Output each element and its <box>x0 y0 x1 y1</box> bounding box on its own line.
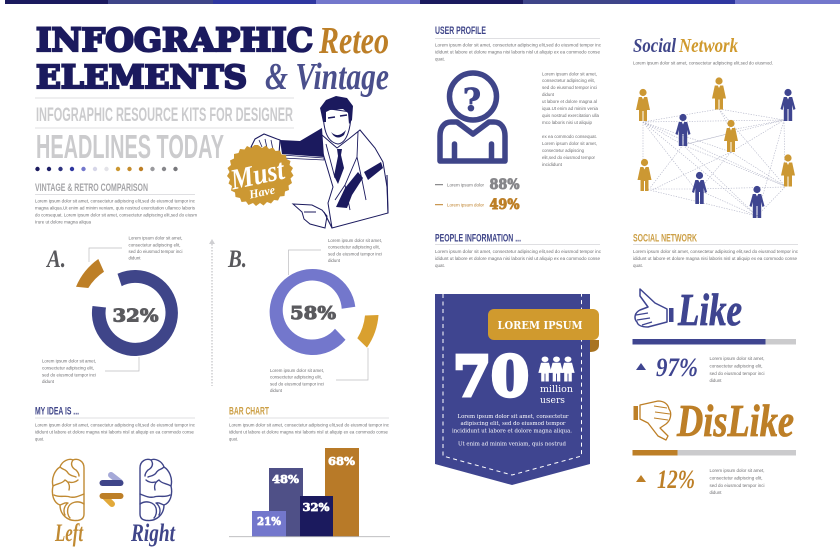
donut chart A: 32% <box>112 306 158 326</box>
title <box>36 20 389 98</box>
icon: anonymous user <box>440 73 505 161</box>
bar: 48% <box>269 468 303 536</box>
text: profile notes: consectetur adipiscing elit, <box>542 78 595 83</box>
stat: 88%: Lorem ipsum dolor <box>447 182 485 188</box>
text: dislike note: consectetur adipiscing elit, <box>710 476 762 480</box>
donut chart A <box>45 246 178 371</box>
icon: right brain <box>140 459 172 521</box>
callout: A top: Lorem ipsum dolor sit amet, <box>128 236 182 240</box>
text: profile notes: ut labore et dolore magna al <box>542 99 597 104</box>
ribbon: lorem ipsum <box>488 309 599 352</box>
text: comparison intro: Lorem ipsum dolor sit amet, consectetur adipiscing elit,sed do eiusmod tempor inc <box>35 198 196 204</box>
panel: like <box>632 284 796 383</box>
panel: social network title: Network <box>678 35 738 57</box>
text: profile notes: consectetur adipiscing <box>542 148 585 153</box>
icon: anonymous user: ? <box>463 82 481 118</box>
label: million users <box>540 385 573 406</box>
text: profile notes <box>542 72 600 167</box>
stat: 49%: Lorem ipsum dolor <box>447 202 485 208</box>
stat: 12% <box>636 465 695 494</box>
text: profile notes: Lorem ipsum dolor sit amet, <box>542 141 597 146</box>
text: comparison intro <box>35 198 197 224</box>
navy people nodes <box>676 89 796 218</box>
text: pocket description: Ut enim ad minim veniam, quis nostrud <box>458 442 566 448</box>
panel: people information heading: quat. <box>435 263 445 268</box>
panel: social network text: quat. <box>633 263 643 268</box>
panel: bar chart: ididunt ut labore et dolore magna nisi laboris nisl ut aliquip ex ea commodo conse <box>229 430 389 434</box>
label: left: Left <box>54 520 84 547</box>
panel: bar chart: BAR CHART <box>229 406 269 418</box>
text: comparison intro: Irure ut dolore magna aliqua <box>35 220 92 224</box>
icon: three people <box>538 356 575 381</box>
subtitle <box>35 98 294 165</box>
icon: swap arrows <box>102 475 120 504</box>
panel: social network title: Lorem ipsum dolor sit amet, consectetur adipiscing elit,sed do eiusmod. <box>633 60 773 66</box>
text: pocket description: adipiscing elit, sed do eiusmod tempor <box>460 421 566 427</box>
text: pocket description: incididunt ut labore et dolore magna aliqua. <box>452 428 572 434</box>
heading: vintage and retro comparison: VINTAGE & RETRO COMPARISON <box>35 182 148 194</box>
panel: social network title: Social <box>633 35 676 57</box>
badge: must have: Have <box>247 182 277 202</box>
subtitle: HEADLINES TODAY <box>36 128 224 165</box>
panel: social network text: SOCIAL NETWORK <box>633 232 697 244</box>
text: dislike note <box>710 468 765 495</box>
bar: 48%: 48% <box>272 473 300 486</box>
text: dislike note: didunt <box>710 490 722 495</box>
callout: A bottom: sed do eiusmod tempor inci <box>42 372 96 378</box>
network diagram <box>636 77 795 216</box>
callout: B bottom: sed do eiusmod tempor inci <box>270 382 324 386</box>
callout: B top <box>328 238 382 263</box>
word: dislike: DisLike <box>676 395 794 446</box>
callout: A bottom <box>42 358 96 384</box>
panel: bar chart <box>229 406 390 537</box>
callout: B top: didunt <box>328 258 341 263</box>
text: comparison intro: do consequat. Lorem ipsum dolor sit amet, consectetur adipiscing elit,sed do eiusm <box>35 212 197 218</box>
callout: B top: consectetur adipiscing elit, <box>328 244 380 250</box>
illustration: retro salesman <box>251 96 388 228</box>
callout: A top: sed do eiusmod tempor inci <box>128 249 183 254</box>
big number 70: 70 <box>453 344 529 408</box>
panel: people information heading: Lorem ipsum dolor sit amet, consectetur adipiscing elit,sed do eiusmod tempor inc <box>435 249 602 254</box>
label: right: Right <box>130 520 176 547</box>
panel: user profile: quat. <box>435 56 445 62</box>
text: profile notes: sed do eiusmod tempor inci <box>542 85 597 90</box>
text: profile notes: mco laboris nisi ut aliquip <box>542 120 593 125</box>
stat: 12%: 12% <box>657 465 695 494</box>
label: million users: million <box>540 385 573 395</box>
callout: B bottom <box>270 368 324 393</box>
text: like note: sed do eiusmod tempor inci <box>710 371 765 376</box>
text: profile notes: didunt <box>542 92 555 97</box>
badge: must have: Must <box>227 154 288 197</box>
callout: A top: consectetur adipiscing elit, <box>128 242 180 248</box>
stat: 88% <box>435 177 520 193</box>
stat: 97% <box>636 353 698 382</box>
text: profile notes: Lorem ipsum dolor sit amet, <box>542 72 597 76</box>
panel: social network text <box>633 232 799 268</box>
callout: B bottom: Lorem ipsum dolor sit amet, <box>270 368 324 373</box>
callout: A bottom: didunt <box>42 379 55 384</box>
icon: thumbs down <box>634 401 671 440</box>
panel: social network text: ididunt ut labore et dolore magna nisi laboris nisl ut aliquip ex ea commodo conse <box>633 256 798 261</box>
bar: 21%: 21% <box>257 515 282 528</box>
panel: people information heading: ididunt ut labore et dolore magna nisi laboris nisl ut aliquip ex ea commodo conse <box>435 256 601 261</box>
panel: people information heading <box>435 232 602 268</box>
callout: A bottom: Lorem ipsum dolor sit amet, <box>42 358 96 364</box>
title: & Vintage <box>265 56 389 98</box>
text: profile notes: incididunt <box>542 162 563 167</box>
donut chart B: 58% <box>290 303 336 324</box>
donut chart B <box>227 246 378 380</box>
panel: my idea: MY IDEA IS ... <box>35 406 79 418</box>
panel: bar chart: quat. <box>229 436 238 442</box>
title: INFOGRAPHIC <box>36 21 313 59</box>
panel: social network text: Lorem ipsum dolor sit amet, consectetur adipiscing elit,sed do eiusmod tempor inc <box>633 249 799 254</box>
panel: my idea: Lorem ipsum dolor sit amet, consectetur adipiscing elit,sed do eiusmod tempor inc <box>35 422 196 428</box>
bar: 21% <box>252 511 286 536</box>
callout: B top: sed do eiusmod tempor inci <box>328 252 382 256</box>
subtitle: INFOGRAPHIC RESOURCE KITS FOR DESIGNER <box>36 104 293 126</box>
stat: 97%: 97% <box>656 353 698 382</box>
text: like note: didunt <box>710 378 722 383</box>
bar: 32% <box>300 496 333 536</box>
panel: pocket with 70 million users <box>435 294 599 485</box>
panel: user profile <box>435 25 602 213</box>
text: profile notes: elit,sed do eiusmod tempor <box>542 155 596 160</box>
text: profile notes: quis nostrud exercitation ulla <box>542 113 600 118</box>
text: profile notes: ex ea commodo consequat. <box>542 134 597 139</box>
text: dislike note: sed do eiusmod tempor inci <box>710 483 765 488</box>
panel: dislike <box>632 395 796 495</box>
text: pocket description <box>452 414 572 448</box>
top colour band <box>5 0 840 4</box>
text: pocket description: Lorem ipsum dolor sit amet, consectetur <box>458 414 569 420</box>
donut chart A: A. <box>45 246 66 273</box>
text: comparison intro: magna aliqua.Ut enim ad minim veniam, quis nostrud exercitation ullamco laboris <box>35 206 196 210</box>
callout: A bottom: consectetur adipiscing elit, <box>42 366 94 370</box>
icon: left brain <box>52 459 84 521</box>
donut chart B: B. <box>227 246 247 273</box>
title: ELEMENTS <box>36 58 247 96</box>
panel: bar chart: Lorem ipsum dolor sit amet, consectetur adipiscing elit,sed do eiusmod tempor inc <box>229 422 390 428</box>
panel: my idea <box>35 406 196 547</box>
title: Reteo <box>318 20 389 62</box>
icon: thumbs up <box>635 289 674 327</box>
panel: user profile: USER PROFILE <box>435 25 486 37</box>
progress bar: dislike <box>632 450 796 456</box>
divider arrow <box>209 239 215 386</box>
panel: social network title <box>633 35 773 66</box>
stat: 88%: 88% <box>490 177 520 193</box>
panel: user profile: Lorem ipsum dolor sit amet, consectetur adipiscing elit,sed do eiusmod tempor inc <box>435 42 602 48</box>
text: profile notes: iqua.Ut enim ad minim venia <box>542 106 599 111</box>
panel: people information heading: PEOPLE INFORMATION ... <box>435 232 521 244</box>
stat: 49% <box>435 197 520 213</box>
bar: 68% <box>325 448 359 536</box>
callout: B bottom: consectetur adipiscing elit, <box>270 374 322 380</box>
text: like note <box>710 356 765 383</box>
progress bar: like <box>632 339 796 344</box>
callout: B bottom: didunt <box>270 388 283 393</box>
callout: B top: Lorem ipsum dolor sit amet, <box>328 238 382 243</box>
text: like note: Lorem ipsum dolor sit amet, <box>710 356 764 361</box>
bar: 32%: 32% <box>302 501 330 514</box>
bar: 68%: 68% <box>328 455 356 468</box>
stat: 49%: 49% <box>490 197 520 213</box>
panel: my idea: quat. <box>35 436 44 442</box>
callout: A top <box>128 236 183 260</box>
panel: my idea: ididunt ut labore et dolore magna nisi laboris nisl ut aliquip ex ea commodo conse <box>35 430 195 434</box>
callout: A top: didunt <box>128 256 141 260</box>
palette dots <box>35 167 178 171</box>
text: dislike note: Lorem ipsum dolor sit amet, <box>710 468 764 473</box>
label: million users: users <box>540 396 565 406</box>
word: like: Like <box>677 284 742 335</box>
people nodes <box>636 77 795 191</box>
text: like note: consectetur adipiscing elit, <box>710 364 762 368</box>
panel: user profile: ididunt ut labore et dolore magna nisi laboris nisl ut aliquip ex ea commodo conse <box>435 50 601 54</box>
ribbon: lorem ipsum: LOREM IPSUM <box>498 319 582 332</box>
